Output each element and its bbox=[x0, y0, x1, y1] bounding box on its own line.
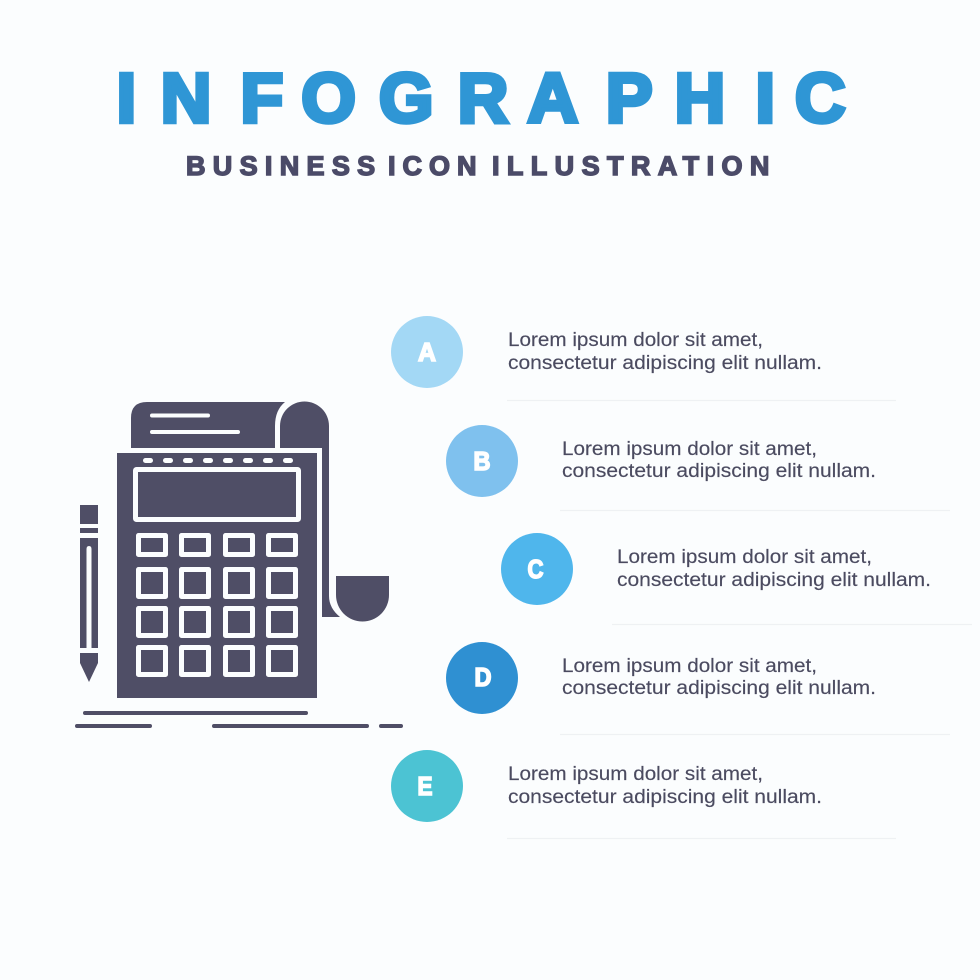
badge B: B bbox=[474, 446, 490, 476]
text D: consectetur adipiscing elit nullam. bbox=[562, 678, 876, 699]
step A bbox=[391, 316, 896, 400]
title: INFOGRAPHIC bbox=[117, 59, 846, 137]
text B bbox=[562, 439, 876, 482]
text B: consectetur adipiscing elit nullam. bbox=[562, 461, 876, 482]
calculator dots bbox=[143, 458, 293, 463]
icon: calculator with paper roll and pencil bbox=[77, 401, 401, 726]
paper text lines bbox=[152, 416, 238, 432]
text E: Lorem ipsum dolor sit amet, bbox=[508, 764, 763, 785]
step C bbox=[501, 533, 972, 624]
text E: consectetur adipiscing elit nullam. bbox=[508, 787, 822, 808]
text C: Lorem ipsum dolor sit amet, bbox=[617, 547, 872, 568]
text A bbox=[508, 330, 822, 374]
icon: calculator body bbox=[117, 453, 317, 698]
badge E bbox=[391, 750, 463, 822]
badge A bbox=[391, 316, 463, 388]
text E bbox=[508, 764, 822, 808]
badge B bbox=[446, 425, 518, 497]
text C bbox=[617, 547, 931, 591]
subtitle: ILLUSTRATION bbox=[492, 151, 777, 181]
subtitle: BUSINESS bbox=[186, 151, 382, 181]
text A: Lorem ipsum dolor sit amet, bbox=[508, 330, 763, 351]
calculator display bbox=[136, 470, 298, 520]
text C: consectetur adipiscing elit nullam. bbox=[617, 570, 931, 591]
icon: paper roll bbox=[280, 401, 329, 617]
badge C bbox=[501, 533, 573, 605]
icon: paper strip end bbox=[322, 450, 340, 617]
step D bbox=[446, 642, 950, 734]
text A: consectetur adipiscing elit nullam. bbox=[508, 353, 822, 374]
icon: paper curl bbox=[336, 576, 389, 622]
text D bbox=[562, 656, 876, 699]
subtitle: ICON bbox=[388, 151, 484, 181]
icon: pencil bbox=[80, 505, 98, 682]
icon: paper sheet bbox=[131, 402, 285, 448]
step B bbox=[446, 425, 950, 510]
text B: Lorem ipsum dolor sit amet, bbox=[562, 439, 817, 460]
badge D: D bbox=[474, 662, 492, 692]
badge C: C bbox=[528, 554, 544, 584]
badge A: A bbox=[418, 337, 436, 367]
badge E: E bbox=[418, 771, 432, 801]
badge D bbox=[446, 642, 518, 714]
calculator keys bbox=[138, 536, 296, 674]
step E bbox=[391, 750, 896, 838]
text D: Lorem ipsum dolor sit amet, bbox=[562, 656, 817, 677]
ground lines bbox=[77, 713, 401, 726]
